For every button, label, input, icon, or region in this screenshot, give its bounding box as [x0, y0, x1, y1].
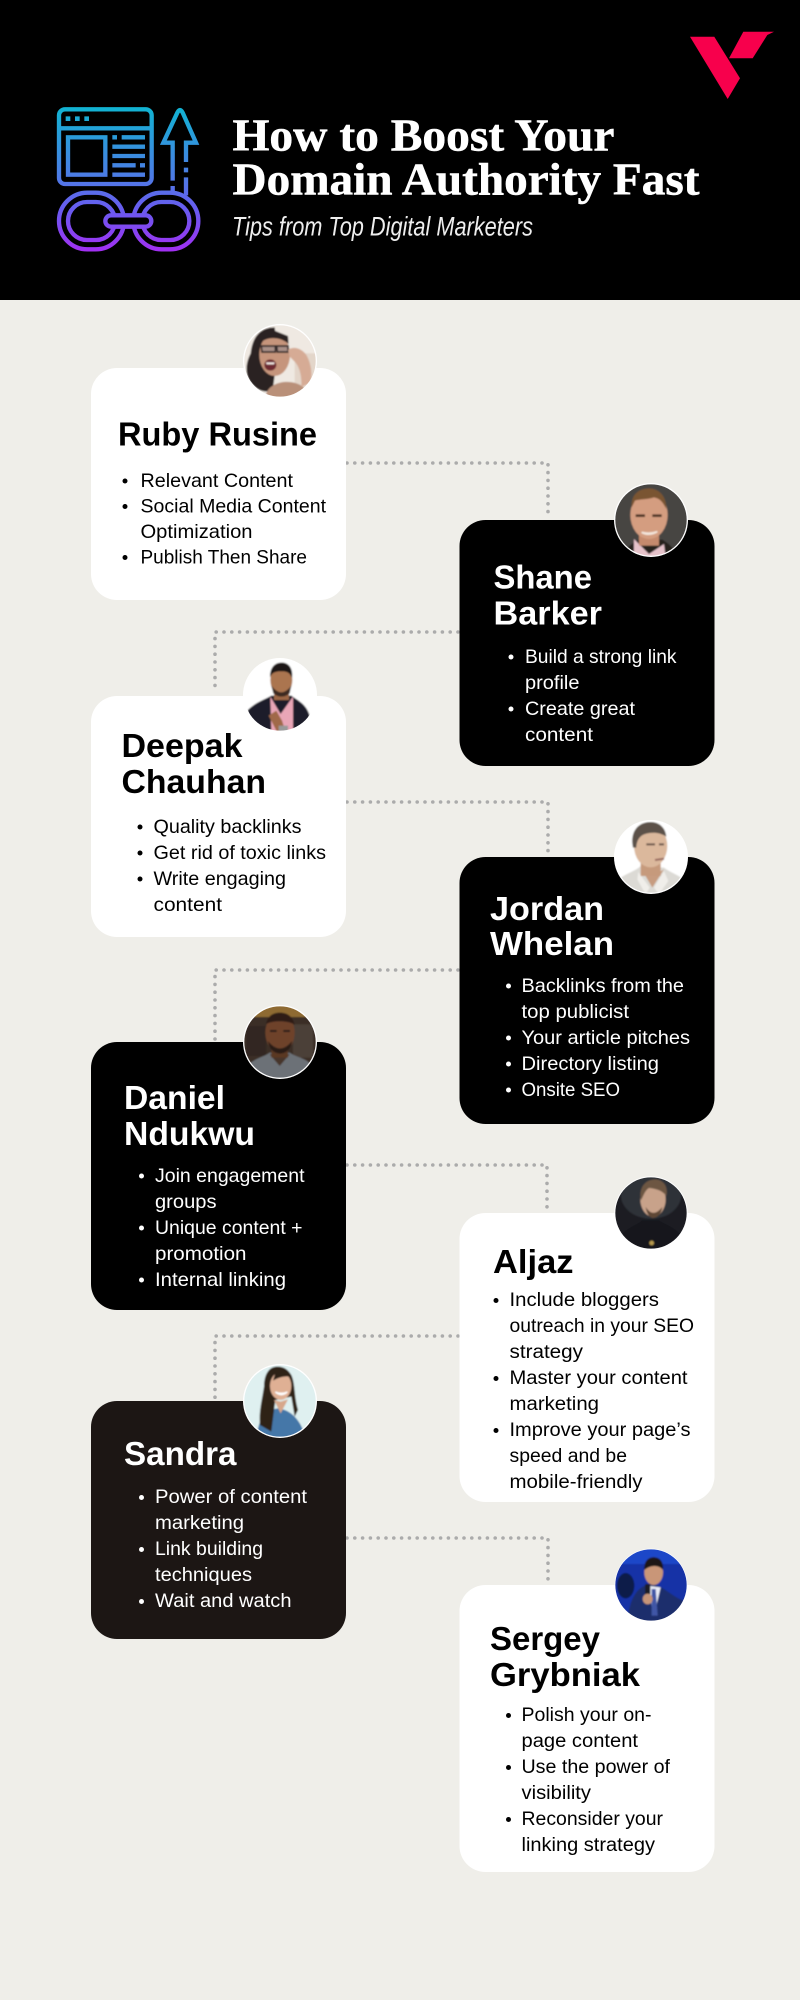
avatar: Ruby Rusine — [243, 324, 317, 397]
card background — [460, 520, 714, 766]
panel: Daniel Ndukwu — [91, 1001, 346, 1310]
title: How to Boost Your — [232, 110, 614, 160]
tips list: Unique content + — [155, 1217, 302, 1239]
name: Whelan — [490, 925, 614, 962]
tips list: Optimization — [140, 521, 252, 543]
card background — [91, 368, 346, 600]
name: Sandra — [124, 1435, 237, 1472]
name: Barker — [494, 594, 602, 632]
name: Ruby Rusine — [118, 416, 317, 452]
tips list: Improve your page’s — [510, 1420, 690, 1441]
name — [124, 1079, 255, 1152]
name: Deepak — [122, 727, 243, 764]
tips list: Get rid of toxic links — [154, 842, 326, 864]
panel: Deepak Chauhan — [91, 654, 346, 937]
card background — [91, 1401, 346, 1639]
avatar: Aljaz — [614, 1176, 688, 1249]
name: Chauhan — [122, 763, 266, 800]
tips list: Master your content — [510, 1368, 688, 1389]
card background — [460, 1585, 714, 1872]
title — [232, 110, 700, 204]
tips list: Directory listing — [522, 1053, 659, 1075]
tips list: groups — [155, 1191, 217, 1213]
tips list: content — [154, 894, 223, 916]
tips list: techniques — [155, 1565, 252, 1586]
name: Grybniak — [490, 1656, 641, 1693]
title: Domain Authority Fast — [232, 154, 700, 204]
panel: Ruby Rusine — [91, 320, 346, 600]
avatar: Shane Barker — [614, 483, 688, 557]
tips list: Polish your on- — [522, 1705, 652, 1726]
avatar: Deepak Chauhan — [243, 658, 317, 731]
panel: Sergey Grybniak — [460, 1544, 714, 1872]
card background — [91, 696, 346, 937]
tips list: linking strategy — [522, 1835, 656, 1856]
tips list: profile — [525, 672, 580, 694]
avatar: Sandra — [243, 1364, 317, 1438]
avatar: Sergey Grybniak — [614, 1548, 688, 1621]
tips list: Reconsider your — [522, 1809, 664, 1830]
tips list — [122, 470, 327, 568]
tips list: marketing — [510, 1394, 599, 1415]
tips list: page content — [522, 1731, 639, 1752]
name: Shane — [494, 558, 592, 596]
tips list — [139, 1487, 308, 1612]
tips list: Social Media Content — [140, 496, 327, 518]
tips list: Create great — [525, 698, 636, 720]
subtitle: Tips from Top Digital Marketers — [232, 212, 533, 242]
connector: Sandra to Sergey — [347, 1538, 548, 1583]
tips list: Your article pitches — [522, 1027, 690, 1049]
card background — [460, 857, 714, 1124]
tips list: Internal linking — [155, 1269, 286, 1291]
name: Jordan — [490, 890, 604, 927]
tips list: Join engagement — [155, 1165, 305, 1187]
tips list — [138, 816, 326, 916]
tips list: Quality backlinks — [154, 816, 302, 838]
tips list — [494, 1290, 694, 1493]
connector: Aljaz to Sandra — [215, 1336, 458, 1401]
name: Aljaz — [493, 1243, 574, 1280]
avatar: Jordan Whelan — [614, 820, 688, 894]
tips list: visibility — [522, 1783, 592, 1804]
tips list: promotion — [155, 1243, 246, 1265]
name: Sergey — [490, 1620, 601, 1657]
panel: Shane Barker — [460, 479, 714, 766]
tips list: Publish Then Share — [140, 546, 307, 568]
connector: Jordan to Daniel — [215, 970, 458, 1042]
card background — [91, 1042, 346, 1310]
tips list — [506, 1705, 671, 1856]
tips list: Onsite SEO — [522, 1079, 620, 1101]
tips list — [508, 646, 677, 746]
tips list: mobile-friendly — [510, 1472, 643, 1493]
tips list: top publicist — [522, 1001, 630, 1023]
panel: Aljaz — [460, 1172, 714, 1502]
connector: Shane to Deepak — [215, 632, 458, 690]
tips list: Wait and watch — [155, 1591, 292, 1612]
tips list: Build a strong link — [525, 646, 677, 668]
tips list: content — [525, 724, 594, 746]
panel: Sandra — [91, 1360, 346, 1639]
name — [490, 890, 614, 962]
tips list: outreach in your SEO — [510, 1316, 694, 1337]
tips list: Power of content — [155, 1487, 308, 1508]
tips list: Include bloggers — [510, 1290, 659, 1311]
name — [122, 727, 266, 800]
connector: Deepak to Jordan — [347, 802, 548, 852]
tips list — [139, 1165, 305, 1291]
tips list: Use the power of — [522, 1757, 671, 1778]
tips list: strategy — [510, 1342, 584, 1363]
icon: brand logo — [690, 32, 774, 99]
tips list: marketing — [155, 1513, 244, 1534]
name — [494, 558, 602, 632]
tips list: speed and be — [510, 1446, 627, 1467]
tips list: Relevant Content — [140, 470, 294, 492]
tips list: Backlinks from the — [522, 975, 684, 997]
header band — [0, 0, 800, 300]
tips list: Write engaging — [154, 868, 286, 890]
tips list — [506, 975, 690, 1101]
connector: Ruby to Shane — [347, 463, 548, 512]
panel: Jordan Whelan — [460, 816, 714, 1124]
icon: browser window, arrow and chain link — [59, 109, 198, 249]
connector: Daniel to Aljaz — [347, 1165, 547, 1213]
name: Ndukwu — [124, 1115, 255, 1152]
name — [490, 1620, 641, 1693]
name: Daniel — [124, 1079, 225, 1116]
avatar: Daniel Ndukwu — [243, 1005, 317, 1079]
card background — [460, 1213, 714, 1502]
tips list: Link building — [155, 1539, 263, 1560]
